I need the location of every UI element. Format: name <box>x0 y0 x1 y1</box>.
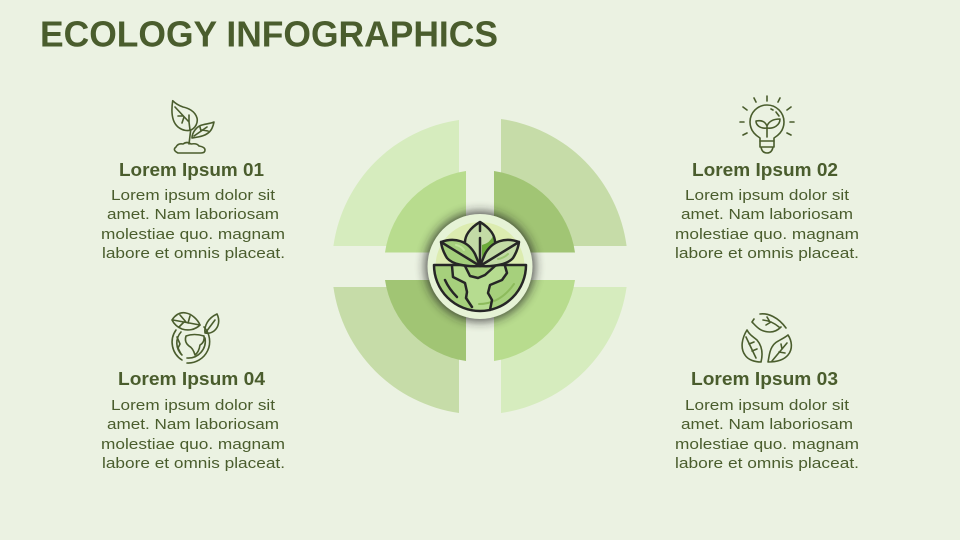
text block 01: Lorem ipsum dolor sit <box>111 187 276 204</box>
outer sector top right <box>501 119 627 246</box>
icon: earth with leaves <box>172 313 219 363</box>
text block 03: molestiae quo. magnam <box>675 436 859 453</box>
text block 02: molestiae quo. magnam <box>675 226 859 243</box>
heading 02: Lorem Ipsum 02 <box>692 160 838 180</box>
item 03 <box>675 314 859 472</box>
text block 01: labore et omnis placeat. <box>102 245 285 262</box>
inner sector bottom left <box>385 280 466 361</box>
heading 03: Lorem Ipsum 03 <box>691 369 838 389</box>
text block 01: molestiae quo. magnam <box>101 226 285 243</box>
central quarter-circle diagram <box>333 119 627 413</box>
inner sector top left <box>385 171 466 252</box>
icon: recycling leaves <box>742 314 791 362</box>
left leaf <box>441 240 480 266</box>
text block 04: labore et omnis placeat. <box>102 455 285 472</box>
inner sector top right <box>494 171 575 252</box>
right leaf <box>480 240 519 266</box>
item 01 <box>101 101 285 262</box>
item 02 <box>675 96 859 262</box>
text block 04: molestiae quo. magnam <box>101 436 285 453</box>
text block 03: Lorem ipsum dolor sit <box>685 397 850 414</box>
icon: sprout <box>172 101 214 153</box>
text block 01: amet. Nam laboriosam <box>107 206 279 223</box>
central badge: earth with leaves <box>425 212 535 322</box>
inner sector bottom right <box>494 280 575 361</box>
icon: light bulb <box>740 96 794 153</box>
text block 04 <box>101 397 285 472</box>
text block 03: labore et omnis placeat. <box>675 455 859 472</box>
outer sector bottom left <box>333 287 459 413</box>
heading 01: Lorem Ipsum 01 <box>119 160 264 180</box>
globe <box>434 265 526 311</box>
text block 02 <box>675 187 859 262</box>
item 04 <box>101 313 285 472</box>
text block 02: Lorem ipsum dolor sit <box>685 187 850 204</box>
outer sector top left <box>333 120 459 246</box>
heading 04: Lorem Ipsum 04 <box>118 369 265 389</box>
text block 01 <box>101 187 285 262</box>
title: ECOLOGY INFOGRAPHICS <box>40 14 498 54</box>
center leaf <box>465 222 495 265</box>
text block 03 <box>675 397 859 472</box>
text block 04: Lorem ipsum dolor sit <box>111 397 276 414</box>
text block 04: amet. Nam laboriosam <box>107 416 279 433</box>
text block 02: amet. Nam laboriosam <box>681 206 853 223</box>
text block 03: amet. Nam laboriosam <box>681 416 853 433</box>
text block 02: labore et omnis placeat. <box>675 245 859 262</box>
outer sector bottom right <box>501 287 627 413</box>
